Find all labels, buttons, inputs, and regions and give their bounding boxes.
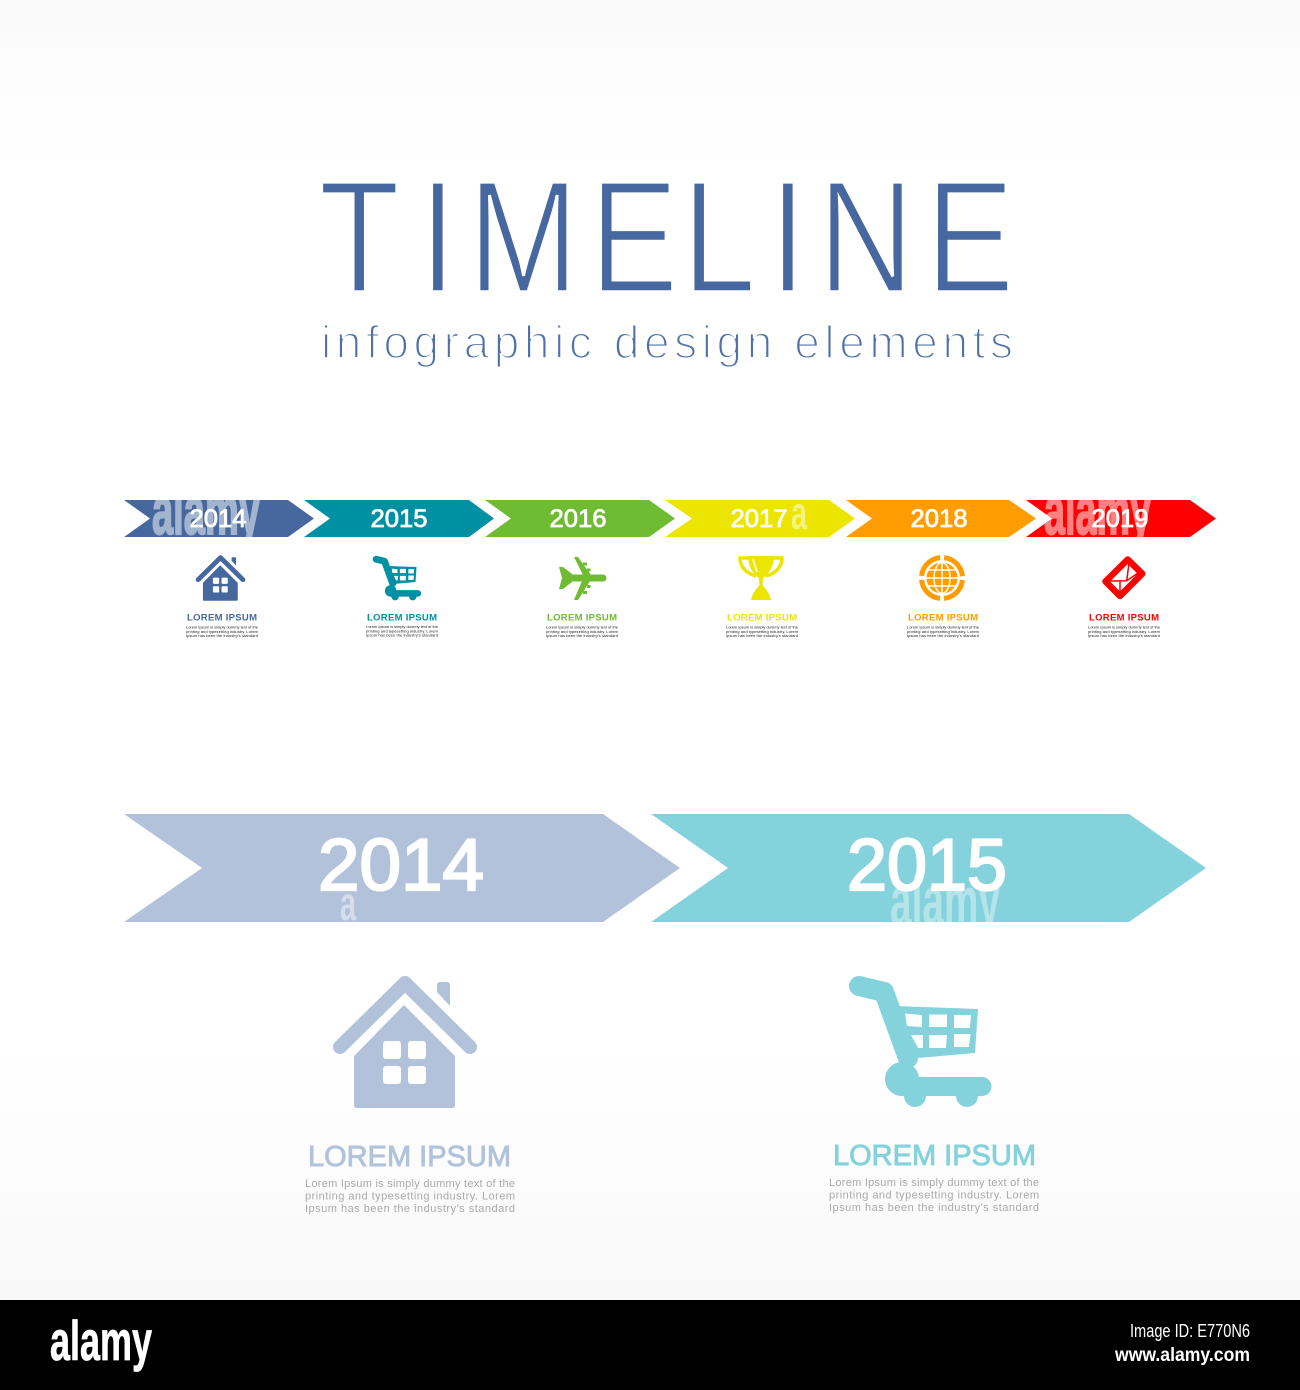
arrow: 2018 bbox=[846, 500, 1036, 537]
caption: 2016: LOREM IPSUM bbox=[547, 612, 617, 624]
icon: cart small bbox=[376, 559, 418, 600]
website: www.alamy.com bbox=[1114, 1345, 1250, 1366]
small timeline bbox=[124, 500, 1216, 638]
large panel: 2015 bbox=[651, 814, 1206, 1214]
arrow: 2014: 2014 bbox=[190, 505, 247, 533]
caption: 2017: Lorem Ipsum is simply dummy text of the bbox=[726, 624, 799, 630]
text block: printing and typesetting industry. Lorem bbox=[305, 1190, 515, 1202]
heading: lorem ipsum: LOREM IPSUM bbox=[308, 1141, 511, 1173]
icon: plane bbox=[559, 557, 603, 600]
caption: 2015: printing and typesetting industry. Lorem bbox=[366, 628, 439, 633]
large arrow: 2015 bbox=[651, 814, 1206, 922]
image id: Image ID: E770N6 bbox=[1130, 1321, 1250, 1341]
icon: mail bbox=[1106, 560, 1142, 596]
arrow: 2015: 2015 bbox=[370, 505, 428, 533]
text block: Lorem Ipsum is simply dummy text of the bbox=[829, 1177, 1039, 1189]
caption: 2017: printing and typesetting industry. Lorem bbox=[726, 629, 799, 634]
large arrow: 2014: a bbox=[340, 878, 356, 931]
footer logo: alamy bbox=[50, 1309, 152, 1372]
caption: 2016: Lorem Ipsum is simply dummy text of the bbox=[546, 624, 619, 630]
caption: 2014 bbox=[186, 612, 259, 638]
large arrow: 2014 bbox=[124, 814, 680, 931]
caption: 2014: Ipsum has been the industry's standard bbox=[186, 633, 258, 638]
icon: house small bbox=[198, 557, 243, 601]
arrow: 2019 bbox=[1026, 500, 1216, 537]
large arrow: 2015: alamy bbox=[890, 862, 1000, 940]
caption: 2016: Ipsum has been the industry's standard bbox=[546, 633, 618, 638]
caption: 2015: Lorem Ipsum is simply dummy text of the bbox=[366, 624, 439, 629]
caption: 2018: Ipsum has been the industry's standard bbox=[907, 633, 979, 638]
caption: 2014: Lorem Ipsum is simply dummy text of the bbox=[186, 624, 259, 630]
caption: 2015 bbox=[366, 612, 439, 638]
caption: 2019: printing and typesetting industry. Lorem bbox=[1088, 629, 1161, 634]
caption: 2019: Ipsum has been the industry's standard bbox=[1088, 633, 1160, 638]
arrow: 2017: 2017 bbox=[730, 505, 788, 533]
arrow: 2018: 2018 bbox=[910, 505, 968, 533]
caption: 2014: printing and typesetting industry. Lorem bbox=[186, 629, 259, 634]
text block: Lorem Ipsum is simply dummy text of the bbox=[305, 1178, 515, 1190]
caption: 2016: printing and typesetting industry. Lorem bbox=[546, 629, 619, 634]
caption: 2017 bbox=[726, 612, 799, 638]
caption: 2017: LOREM IPSUM bbox=[727, 612, 797, 624]
text block bbox=[305, 1178, 515, 1215]
arrow: 2015 bbox=[304, 500, 494, 537]
text block: Ipsum has been the industry's standard bbox=[829, 1202, 1039, 1214]
footer bar bbox=[0, 1300, 1300, 1390]
caption: 2018: printing and typesetting industry. Lorem bbox=[907, 629, 980, 634]
caption: 2019 bbox=[1088, 612, 1161, 638]
caption: 2014: LOREM IPSUM bbox=[187, 612, 257, 624]
arrow: 2014: alamy bbox=[152, 473, 260, 549]
title: TIMELINE bbox=[319, 148, 1014, 327]
icon: house large bbox=[340, 982, 470, 1108]
arrow: 2019: 2019 bbox=[1092, 505, 1148, 533]
caption: 2015: Ipsum has been the industry's standard bbox=[366, 633, 438, 638]
subtitle: infographic design elements bbox=[321, 316, 1013, 368]
large panel: 2014 bbox=[124, 814, 680, 1215]
caption: 2016 bbox=[546, 612, 619, 638]
icon: cart large bbox=[859, 986, 982, 1107]
caption: 2018: Lorem Ipsum is simply dummy text of the bbox=[907, 624, 980, 630]
caption: 2018: LOREM IPSUM bbox=[908, 612, 978, 624]
caption: 2019: Lorem Ipsum is simply dummy text of the bbox=[1088, 624, 1161, 630]
text block: printing and typesetting industry. Lorem bbox=[829, 1190, 1039, 1202]
large arrow: 2014: 2014 bbox=[318, 825, 484, 906]
arrow: 2016 bbox=[485, 500, 675, 537]
caption: 2015: LOREM IPSUM bbox=[367, 612, 437, 624]
text block: Ipsum has been the industry's standard bbox=[305, 1203, 515, 1215]
text block bbox=[829, 1177, 1039, 1214]
arrow: 2017 bbox=[665, 487, 855, 539]
arrow: 2019: alamy bbox=[1044, 473, 1151, 549]
caption: 2017: Ipsum has been the industry's standard bbox=[726, 633, 798, 638]
heading: lorem ipsum: LOREM IPSUM bbox=[833, 1140, 1036, 1172]
icon: globe bbox=[922, 558, 962, 598]
arrow: 2014 bbox=[124, 500, 314, 537]
caption: 2019: LOREM IPSUM bbox=[1089, 612, 1159, 624]
arrow: 2016: 2016 bbox=[550, 505, 606, 533]
large arrow: 2015: 2015 bbox=[847, 825, 1007, 906]
caption: 2018 bbox=[907, 612, 980, 638]
arrow: 2017: a bbox=[791, 487, 807, 539]
icon: trophy bbox=[740, 556, 782, 600]
